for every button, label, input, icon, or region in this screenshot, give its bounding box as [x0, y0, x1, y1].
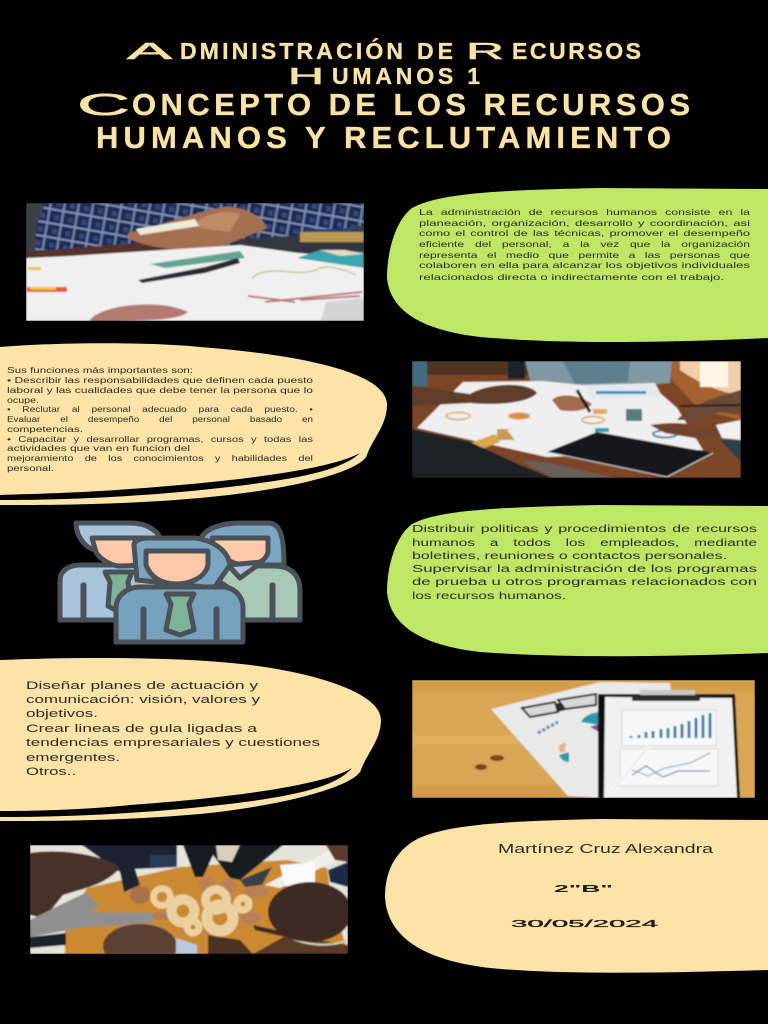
policies text: boletines, reuniones o contactos personales.	[412, 551, 727, 562]
swoosh cut	[0, 453, 360, 500]
cream blob	[0, 658, 381, 821]
plans text: tendencias empresariales y cuestiones	[26, 737, 321, 749]
photo: team reviewing reports	[412, 361, 741, 478]
definition text: representa el medio que permite a las personas que	[419, 251, 751, 260]
title: R	[466, 38, 504, 64]
plans text	[26, 680, 321, 778]
cream blob	[0, 343, 387, 505]
cream blob	[385, 819, 768, 973]
photo: hand with phone over charts	[26, 203, 364, 321]
title: DMINISTRACIÓN	[180, 37, 403, 64]
policies text	[412, 524, 758, 602]
functions text: mejoramiento de los conocimientos y habilidades del	[7, 454, 313, 463]
definition text	[419, 208, 751, 282]
plans text: objetivos.	[26, 708, 98, 720]
photo: clipboard with charts on wooden desk	[412, 680, 755, 798]
policies text: humanos a todos los empleados, mediante	[412, 538, 758, 549]
functions text: ocupe.	[7, 396, 39, 405]
right person	[195, 523, 300, 620]
panel: policies	[387, 505, 768, 656]
title: ECURSOS	[512, 38, 641, 64]
icon: group of three employees	[60, 523, 300, 642]
functions text: Sus funciones más importantes son:	[7, 366, 193, 375]
title	[77, 37, 690, 155]
title: C	[77, 87, 130, 122]
author name: Martínez Cruz Alexandra	[498, 842, 713, 856]
policies text: Distribuir politicas y procedimientos de recursos	[412, 524, 757, 535]
title: DE	[417, 38, 453, 64]
functions text: personal.	[7, 464, 54, 473]
functions text: competencias.	[7, 425, 83, 434]
plans text: Crear lineas de gula ligadas a	[26, 723, 258, 735]
title: UMANOS 1	[332, 63, 480, 89]
title: HUMANOS Y RECLUTAMIENTO	[96, 120, 671, 155]
definition text: colaboren en ella para alcanzar los objetivos individuales	[419, 261, 750, 270]
definition text: eficiente del personal, a la vez que la organización	[419, 240, 751, 249]
photo: team assembling wooden gears	[30, 845, 348, 954]
plans text: emergentes.	[26, 752, 120, 764]
panel: functions	[0, 343, 387, 505]
functions text	[7, 366, 314, 473]
definition text: planeación, organización, desarrollo y coordinación, asi	[419, 219, 750, 228]
functions text: • Capacitar y desarrollar programas, cursos y todas las	[7, 435, 313, 444]
functions text: Evaluar el desempeño del personal basado en	[7, 415, 313, 424]
swoosh cut	[0, 768, 352, 817]
functions text: laboral y las cualidades que debe tener la persona que lo	[7, 386, 314, 395]
front person	[116, 538, 243, 642]
policies text: de prueba u otros programas relacionados con	[412, 577, 757, 588]
panel: definition	[387, 188, 768, 342]
panel: author details	[385, 819, 768, 973]
panel: plans	[0, 658, 381, 821]
title: H	[288, 63, 324, 89]
green blob	[387, 505, 768, 656]
policies text: Supervisar la administración de los programas	[412, 564, 757, 575]
plans text: Diseñar planes de actuación y	[26, 680, 259, 692]
functions text: actividades que van en funcion del	[7, 444, 190, 453]
functions text: • Reclutar al personal adecuado para cada puesto. •	[7, 405, 313, 414]
functions text: • Describir las responsabilidades que definen cada puesto	[7, 376, 314, 385]
definition text: como el control de las técnicas, promover el desempeño	[419, 229, 751, 238]
policies text: los recursos humanos.	[412, 591, 566, 602]
left person	[60, 523, 180, 620]
title: ONCEPTO DE LOS RECURSOS	[132, 87, 690, 122]
plans text: comunicación: visión, valores y	[26, 694, 261, 706]
plans text: Otros..	[26, 766, 76, 778]
date: 30/05/2024	[511, 919, 659, 930]
definition text: relacionados directa o indirectamente con el trabajo.	[419, 273, 724, 282]
green blob	[387, 188, 768, 342]
definition text: La administración de recursos humanos consiste en la	[419, 208, 751, 217]
group: 2"B"	[554, 884, 614, 895]
title: A	[127, 38, 174, 64]
